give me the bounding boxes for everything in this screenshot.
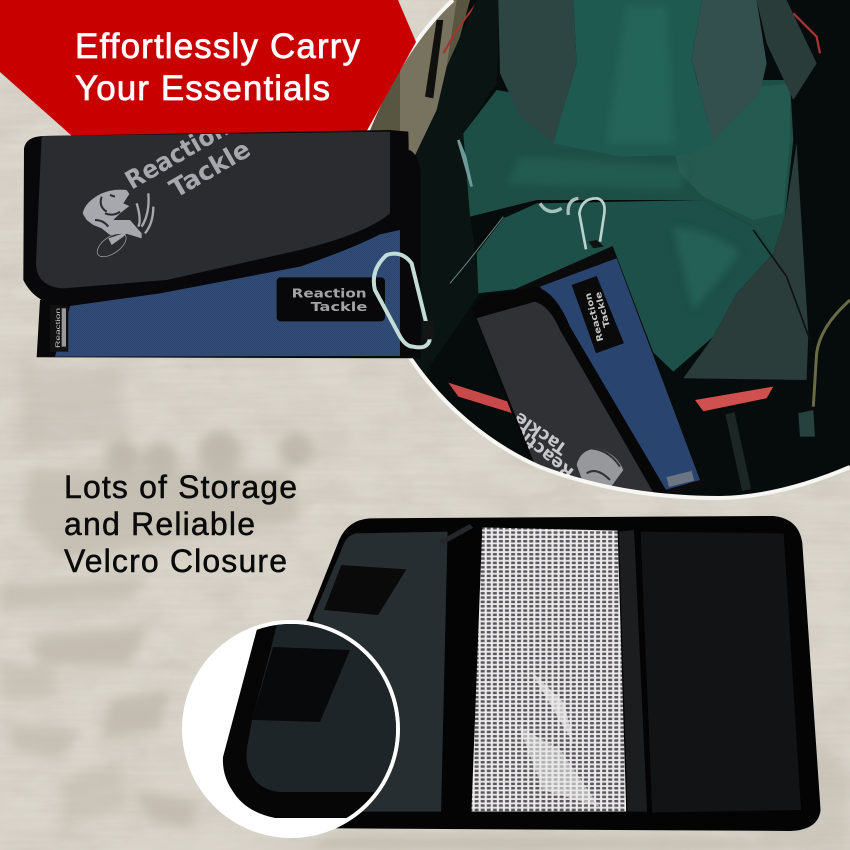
- banner heading: Your Essentials: [75, 69, 330, 108]
- body text: storage: Velcro Closure: [64, 543, 287, 579]
- hanging wallet on backpack: Tackle: [594, 290, 613, 328]
- banner heading: [75, 27, 360, 108]
- body text: storage: and Reliable: [64, 506, 255, 542]
- right strap: [757, 0, 817, 100]
- red straps: [448, 383, 515, 414]
- inner panel: [246, 620, 400, 792]
- centre dark strip: [619, 530, 647, 812]
- top pocket green centre: [553, 0, 713, 157]
- carabiner: [374, 254, 430, 347]
- black label patch: [277, 277, 385, 321]
- top pocket grey left: [498, 0, 577, 143]
- hanging wallet on backpack: Reaction: [584, 292, 606, 342]
- fish logo: [577, 448, 623, 488]
- hanging wallet on backpack: [472, 198, 704, 500]
- velcro: [324, 565, 406, 615]
- black label patch: Reaction: [292, 286, 367, 300]
- left strap and flank: [414, 0, 498, 374]
- flap border: [23, 130, 409, 306]
- pale loops: [458, 140, 472, 187]
- flap logo text: Tackle: [511, 407, 571, 458]
- flap logo text: Reaction: [499, 413, 578, 482]
- binding: [223, 620, 400, 818]
- flap face: [36, 132, 390, 288]
- velcro strip: [252, 647, 350, 722]
- side tag: [50, 305, 68, 352]
- side tag: Reaction: [55, 308, 62, 348]
- velcro zoom circle: [182, 620, 400, 838]
- open wallet: [306, 516, 821, 831]
- body text: storage: Lots of Storage: [64, 469, 297, 505]
- flap logo text: Reaction: [120, 112, 234, 195]
- red banner: [0, 0, 416, 136]
- zip: [450, 217, 503, 283]
- outer binding: [222, 516, 821, 831]
- grey lower right wedge: [683, 143, 808, 380]
- back body: [37, 150, 421, 358]
- body text: storage: [64, 469, 297, 579]
- banner heading: Effortlessly Carry: [75, 27, 360, 66]
- lower pocket: [477, 200, 773, 372]
- flap logo text: Tackle: [164, 133, 255, 204]
- left panel: [313, 532, 448, 812]
- top pocket grey right: [692, 0, 767, 140]
- label patch: [572, 276, 624, 353]
- black label patch: Tackle: [311, 300, 367, 314]
- fish logo on flap: [83, 190, 153, 261]
- photo: backpack in circular crop: [360, 0, 850, 510]
- highlights: [611, 10, 670, 140]
- zipper: [441, 526, 471, 543]
- blue side: [507, 246, 654, 413]
- right side buckle: [813, 300, 850, 407]
- carabiner: [579, 198, 605, 249]
- closed wallet with carabiner: [23, 112, 433, 358]
- right panel: [641, 532, 801, 813]
- mid band: [463, 80, 793, 253]
- flap logo text: [124, 134, 250, 196]
- wood sliver behind backpack: [368, 0, 470, 131]
- mesh pocket: [469, 527, 630, 813]
- blue panel: [55, 230, 400, 357]
- flap logo text: [516, 412, 574, 475]
- flap: [507, 288, 666, 490]
